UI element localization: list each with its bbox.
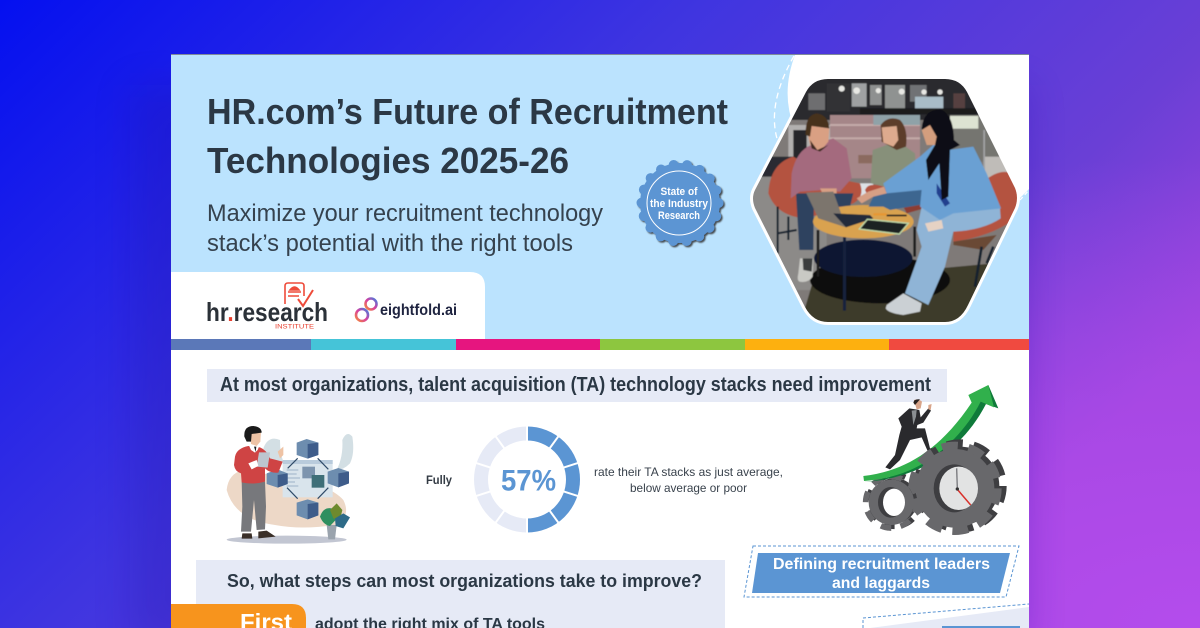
panel: leaders and laggards (cropped) [863, 604, 1029, 628]
label: rate their TA stacks: rate their TA stacks as just average, [594, 465, 783, 479]
badge: state of the industry research: the Industry [650, 198, 709, 210]
logo panel [171, 272, 485, 339]
colour stripe [171, 339, 1029, 350]
subtitle: stack’s potential with the right tools [207, 230, 573, 257]
woman in olive sweater [864, 118, 922, 206]
badge: state of the industry research: State of [660, 186, 698, 198]
logo: hr.research institute [206, 283, 328, 330]
illustration: man with tablet and cubes [227, 426, 353, 544]
photo: three colleagues around a table [747, 73, 1023, 327]
callout: defining recruitment leaders and laggards: Defining recruitment leaders [773, 556, 990, 573]
logo: eightfold.ai: eightfold.ai [380, 302, 457, 319]
panel: header [171, 55, 1029, 339]
logo: hr.research institute: INSTITUTE [275, 324, 315, 330]
label: rate their TA stacks [594, 465, 783, 495]
infographic card [171, 54, 1029, 628]
icon: potted plant [320, 503, 350, 539]
badge: state of the industry research: Research [658, 210, 700, 222]
right chair [903, 172, 1020, 287]
label: fully: Fully [426, 473, 452, 487]
illustration: businessman on rising arrow over gears [863, 385, 1003, 531]
figure: businessman [885, 399, 934, 469]
badge: state of the industry research [640, 163, 720, 243]
man in pink shirt [768, 113, 861, 282]
icon: large gear with clock [912, 443, 1003, 531]
icon: small gear [866, 475, 920, 528]
heading: TA stacks need improvement [207, 369, 947, 402]
heading: so what steps: So, what steps can most organizations take to improve? [227, 570, 702, 591]
heading: so what steps [171, 560, 725, 628]
label: rate their TA stacks: below average or poor [630, 481, 747, 495]
icon: green arrow [863, 385, 998, 482]
donut chart 57% [475, 425, 579, 534]
title: HR.com’s Future of Recruitment [207, 91, 728, 132]
subtitle [207, 200, 603, 257]
woman in denim [857, 109, 1001, 315]
title: Technologies 2025-26 [207, 140, 569, 181]
first step tab [171, 604, 306, 628]
callout: defining recruitment leaders and laggards: and laggards [832, 575, 930, 592]
icon: cubes [267, 439, 349, 519]
heading: TA stacks need improvement: At most organizations, talent acquisition (TA) technology stacks need improvement [220, 374, 931, 396]
donut chart 57%: 57% [501, 464, 556, 498]
table and laptop [806, 192, 916, 311]
subtitle: Maximize your recruitment technology [207, 200, 603, 227]
title [207, 91, 728, 181]
logo: hr.research institute: hr.research [206, 297, 328, 327]
logo: eightfold.ai [356, 298, 457, 321]
callout: defining recruitment leaders and laggards [744, 546, 1019, 597]
figure: man [234, 426, 283, 539]
